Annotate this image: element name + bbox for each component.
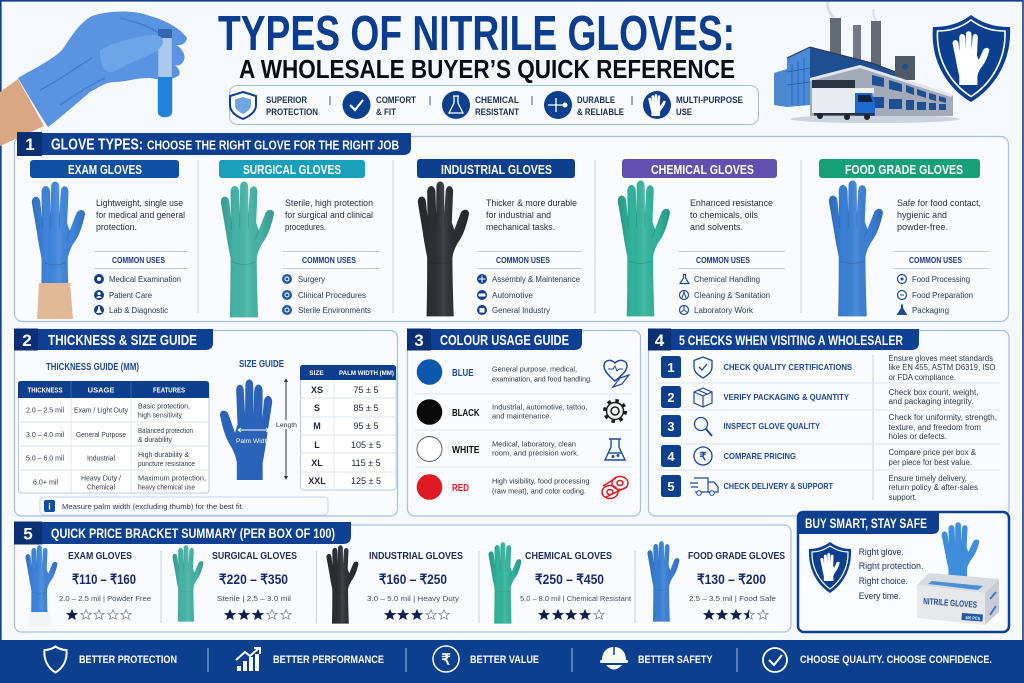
price: food grade gloves: ₹130 – ₹200: [697, 571, 766, 587]
illustration: glove rising from box: [917, 522, 999, 625]
column: exam gloves: Patient Care: [109, 291, 153, 300]
price: chemical gloves: CHEMICAL GLOVES: [525, 551, 612, 562]
row: blue: BLUE: [452, 368, 474, 379]
text: superior protection: PROTECTION: [266, 107, 318, 117]
check 4: compare pricing: COMPARE PRICING: [724, 451, 796, 461]
text: comfort and fit: & FIT: [376, 107, 396, 117]
glove: industrial: [418, 181, 469, 316]
diagram: hand measurement: [220, 378, 298, 528]
check 2: packaging and quantity: Check box count, weight,: [888, 388, 978, 397]
glove: chemical: [618, 180, 670, 316]
column: industrial gloves: Assembly & Maintenance: [492, 275, 581, 284]
heading: glove types: 1: [25, 135, 35, 154]
row: red: (raw meat), and color coding.: [492, 486, 586, 496]
illustration: glove rising from box: 100 PCS: [965, 615, 980, 621]
panel: 5 checks when visiting a wholesaler: [648, 328, 1009, 516]
footer banner: [0, 640, 1024, 683]
row: red: [417, 474, 628, 500]
text: durable and reliable: [577, 95, 624, 117]
row: blue: examination, and food handling.: [492, 374, 592, 384]
column: exam gloves: EXAM GLOVES: [68, 162, 142, 177]
heading: 5 checks: [648, 328, 919, 350]
icon: heart and hand: [604, 360, 629, 387]
column: food grade gloves: FOOD GRADE GLOVES: [845, 162, 963, 177]
panel: quick price bracket summary: [14, 522, 791, 632]
price: industrial gloves: INDUSTRIAL GLOVES: [369, 551, 463, 562]
column: food grade gloves: Food Preparation: [912, 291, 973, 300]
table: thickness guide: General Purpose: [76, 430, 126, 439]
row: white: [417, 436, 625, 462]
footer item: better value: ₹: [441, 652, 451, 668]
table: thickness guide: puncture resistance: [138, 459, 195, 468]
table: size chart: PALM WIDTH (MM): [339, 370, 394, 377]
heading: thickness and size guide: 2: [22, 331, 32, 350]
table: size chart: XL: [311, 458, 323, 468]
price: exam gloves: EXAM GLOVES: [68, 551, 132, 562]
text: superior protection: SUPERIOR: [266, 95, 307, 105]
panel: colour usage guide: [407, 328, 640, 516]
price: food grade gloves: [648, 541, 785, 622]
table: thickness guide: Balanced protection: [138, 426, 193, 435]
footer item: better performance: BETTER PERFORMANCE: [273, 654, 384, 666]
column: surgical gloves: Clinical Procedures: [298, 291, 366, 300]
table: thickness guide: Heavy Duty /: [81, 474, 122, 482]
text: chemical resistant: RESISTANT: [475, 107, 519, 117]
row: white: room, and precision work.: [492, 448, 579, 458]
check 1: quality certifications: [661, 354, 996, 382]
price: surgical gloves: SURGICAL GLOVES: [212, 551, 297, 562]
heading: colour usage guide: COLOUR USAGE GUIDE: [440, 332, 569, 349]
table: thickness guide: Basic protection,: [138, 402, 190, 410]
column: food grade gloves: hygienic and: [897, 210, 947, 220]
table: thickness guide: 3.0 – 4.0 mil: [26, 430, 64, 439]
table: size chart: 105 ± 5: [351, 440, 381, 450]
column: chemical gloves: Enhanced resistance: [690, 198, 773, 208]
table: thickness guide: Exam / Light Duty: [74, 406, 128, 414]
footer item: better protection: [44, 646, 177, 672]
price: food grade gloves: 2.5 – 3.5 mil | Food Safe: [689, 594, 776, 603]
table: size chart: SIZE: [309, 370, 324, 377]
column: exam gloves: for medical and general: [96, 210, 185, 220]
icon: shield with hand: [933, 15, 1010, 111]
footer item: choose quality: CHOOSE QUALITY. CHOOSE CONFIDENCE.: [800, 654, 992, 666]
callout: measuring note: i: [48, 502, 51, 512]
check 1: quality certifications: CHECK QUALITY CERTIFICATIONS: [724, 362, 852, 372]
callout: measuring note: Measure palm width (excluding thumb) for the best fit.: [62, 502, 244, 511]
rating: three and a half stars: [704, 610, 768, 619]
check 1: quality certifications: or FDA compliance.: [888, 373, 956, 382]
footer item: better safety: BETTER SAFETY: [638, 654, 713, 666]
column: food grade gloves: Food Processing: [912, 275, 970, 284]
check 3: inspect glove quality: INSPECT GLOVE QUALITY: [724, 421, 820, 431]
text: multi-purpose use: [676, 95, 743, 117]
panel: thickness and size guide: [14, 328, 398, 528]
check 2: packaging and quantity: and packaging integrity.: [888, 397, 974, 406]
price: industrial gloves: ₹160 – ₹250: [379, 571, 447, 587]
table: size chart: XXL: [308, 476, 326, 486]
glove: surgical: [221, 181, 274, 317]
icon: shield protection: [230, 92, 256, 119]
table: size chart: S: [314, 403, 320, 413]
row: red: High visibility, food processing: [492, 476, 590, 486]
row: white: Medical, laboratory, clean: [492, 440, 576, 448]
text: right glove slogan: Right glove.: [859, 547, 904, 558]
illustration: gloved hand holding test tube: [0, 12, 187, 146]
check 4: compare pricing: per piece for best value.: [888, 458, 972, 467]
table: size chart: L: [314, 440, 320, 450]
table: thickness guide: 2.0 – 2.5 mil: [26, 406, 64, 414]
column: surgical gloves: Sterile, high protection: [285, 198, 373, 208]
check 3: inspect glove quality: holes or defects.: [888, 432, 947, 441]
check 1: quality certifications: like EN 455, ASTM D6319, ISO: [888, 363, 996, 372]
text: chemical resistant: CHEMICAL: [475, 95, 519, 105]
column: industrial gloves: [417, 159, 582, 316]
check 4: compare pricing: ₹: [700, 451, 706, 463]
column: chemical gloves: and solvents.: [690, 222, 743, 232]
title: A WHOLESALE BUYER’S QUICK REFERENCE: [239, 54, 735, 84]
heading: size guide: SIZE GUIDE: [239, 359, 284, 370]
text: chemical resistant: [475, 95, 519, 117]
table: thickness guide: 5.0 – 6.0 mil: [26, 454, 64, 462]
check 2: packaging and quantity: [661, 386, 978, 408]
heading: glove types: GLOVE TYPES:: [51, 136, 143, 154]
heading: glove types: CHOOSE THE RIGHT GLOVE FOR THE RIGHT JOB: [147, 138, 399, 152]
row: black: and maintenance.: [492, 412, 552, 420]
table: thickness guide: 6.0+ mil: [33, 478, 58, 486]
price: chemical gloves: [489, 542, 632, 624]
text: multi-purpose use: USE: [676, 107, 692, 117]
check 5: delivery and support: support.: [888, 493, 917, 502]
glove: food grade: [829, 180, 883, 316]
heading: colour usage guide: [407, 328, 582, 350]
price: industrial gloves: [327, 545, 463, 624]
text: durable and reliable: & RELIABLE: [577, 107, 624, 117]
heading: glove types: [17, 132, 411, 156]
check 5: delivery and support: 5: [667, 479, 675, 494]
table: thickness guide: Industrial: [87, 454, 115, 462]
heading: quick price bracket summary: [14, 522, 351, 544]
check 2: packaging and quantity: 2: [667, 390, 675, 405]
heading: 5 checks: 5 CHECKS WHEN VISITING A WHOLESALER: [679, 332, 903, 348]
illustration: factory with delivery truck: [774, 2, 960, 123]
price: surgical gloves: ₹220 – ₹350: [219, 571, 288, 587]
text: right glove slogan: [859, 547, 924, 602]
column: exam gloves: [30, 160, 188, 319]
column: food grade gloves: Packaging: [912, 306, 949, 315]
column: food grade gloves: Safe for food contact,: [897, 198, 981, 208]
column: chemical gloves: to chemicals, oils: [690, 210, 758, 220]
table: size chart: 125 ± 5: [351, 476, 381, 486]
heading: quick price bracket summary: QUICK PRICE BRACKET SUMMARY (PER BOX OF 100): [51, 525, 335, 541]
check 4: compare pricing: Compare price per box &: [888, 448, 977, 457]
table: thickness guide: THICKNESS: [28, 386, 62, 394]
rating: three stars: [385, 610, 449, 619]
text: comfort and fit: [376, 95, 416, 117]
column: exam gloves: protection.: [96, 222, 137, 232]
column: surgical gloves: Sterile Environments: [298, 306, 371, 315]
icon: durable: [544, 91, 572, 119]
column: chemical gloves: Cleaning & Sanitation: [694, 291, 770, 300]
icon: check: [342, 91, 370, 119]
price: surgical gloves: Sterile | 2.5 – 3.0 mil: [217, 594, 291, 603]
footer item: better protection: BETTER PROTECTION: [79, 654, 177, 666]
table: size chart: M: [313, 421, 321, 431]
text: superior protection: [266, 95, 318, 117]
table: thickness guide: Chemical: [87, 482, 115, 492]
price: industrial gloves: 3.0 – 5.0 mil | Heavy Duty: [367, 594, 459, 603]
column: surgical gloves: procedures.: [285, 222, 326, 232]
glove: exam: [32, 181, 85, 319]
column: exam gloves: Lightweight, single use: [96, 198, 183, 208]
icon: raw meat: [602, 476, 628, 498]
text: multi-purpose use: MULTI-PURPOSE: [676, 95, 743, 105]
check 5: delivery and support: [661, 474, 978, 502]
table: thickness guide: high sensitivity: [138, 410, 182, 420]
check 3: inspect glove quality: [661, 413, 997, 441]
column: food grade gloves: COMMON USES: [909, 256, 963, 265]
column: food grade gloves: [819, 159, 989, 316]
price: chemical gloves: ₹250 – ₹450: [535, 571, 604, 587]
text: right glove slogan: Every time.: [859, 591, 901, 602]
title: TYPES OF NITRILE GLOVES:: [218, 7, 735, 61]
heading: 5 checks: 4: [655, 331, 665, 350]
icon: flask: [605, 439, 625, 460]
rating: four stars: [539, 610, 604, 619]
column: chemical gloves: Chemical Handling: [694, 275, 760, 284]
callout: measuring note: [40, 497, 328, 515]
column: surgical gloves: SURGICAL GLOVES: [243, 162, 341, 177]
check 3: inspect glove quality: 3: [667, 419, 675, 434]
rating: one star: [67, 610, 131, 619]
check 4: compare pricing: 4: [667, 449, 675, 464]
illustration: glove rising from box: NITRILE GLOVES: [923, 596, 977, 610]
panel: glove types: [14, 132, 1008, 322]
column: industrial gloves: for industrial and: [486, 210, 551, 220]
check 3: inspect glove quality: texture, and freedom from: [888, 423, 981, 432]
column: exam gloves: COMMON USES: [112, 256, 166, 265]
check 1: quality certifications: Ensure gloves meet standards: [888, 354, 993, 363]
price: chemical gloves: 5.0 – 8.0 mil | Chemical Resistant: [520, 594, 632, 603]
price: exam gloves: [26, 545, 151, 626]
table: thickness guide: heavy chemical use: [138, 482, 195, 492]
price: exam gloves: ₹110 – ₹160: [72, 571, 136, 587]
diagram: hand measurement: Length: [276, 422, 297, 429]
table: size chart: 115 ± 5: [351, 458, 381, 468]
heading: buy smart: BUY SMART, STAY SAFE: [805, 516, 927, 531]
diagram: hand measurement: Palm Width: [236, 438, 270, 445]
icon: gear: [604, 400, 626, 422]
check 4: compare pricing: [661, 445, 977, 467]
heading: thickness guide: THICKNESS GUIDE (MM): [46, 362, 139, 373]
heading: quick price bracket summary: 5: [23, 524, 33, 544]
table: thickness guide: [18, 381, 209, 493]
check 3: inspect glove quality: Check for uniformity, strength,: [888, 413, 997, 422]
table: size chart: 75 ± 5: [354, 385, 378, 395]
check 2: packaging and quantity: VERIFY PACKAGING & QUANTITY: [724, 392, 849, 402]
column: industrial gloves: General Industry: [492, 306, 550, 315]
row: black: [417, 399, 626, 425]
text: right glove slogan: Right protection.: [859, 561, 924, 572]
check 5: delivery and support: Ensure timely delivery,: [888, 474, 967, 483]
table: thickness guide: FEATURES: [153, 386, 185, 394]
table: thickness guide: Maximum protection,: [138, 474, 206, 482]
row: blue: [417, 359, 629, 387]
column: industrial gloves: mechanical tasks.: [486, 222, 555, 232]
row: black: BLACK: [452, 408, 480, 419]
price: exam gloves: 2.0 – 2.5 mil | Powder Free: [59, 594, 151, 603]
table: size chart: 95 ± 5: [354, 421, 378, 431]
column: industrial gloves: Automotive: [492, 291, 534, 300]
row: blue: General purpose, medical,: [492, 364, 577, 374]
table: thickness guide: USAGE: [88, 386, 114, 394]
icon: flask: [442, 91, 470, 119]
column: surgical gloves: [219, 160, 380, 317]
row: white: WHITE: [452, 445, 480, 456]
column: chemical gloves: Laboratory Work: [694, 306, 754, 315]
check 1: quality certifications: 1: [667, 360, 675, 375]
icon: hand: [643, 91, 671, 126]
footer item: better performance: [236, 648, 384, 671]
column: chemical gloves: COMMON USES: [696, 256, 751, 265]
feature strip: [230, 86, 758, 126]
table: thickness guide: & durability: [138, 435, 172, 444]
table: size chart: XS: [311, 385, 323, 395]
column: food grade gloves: powder-free.: [897, 222, 948, 232]
text: right glove slogan: Right choice.: [859, 576, 908, 587]
table: thickness guide: High durability &: [138, 450, 189, 459]
column: industrial gloves: INDUSTRIAL GLOVES: [441, 162, 552, 177]
title: [218, 7, 735, 84]
panel: buy smart, stay safe: [797, 511, 1009, 632]
rating: three stars: [225, 610, 291, 619]
heading: colour usage guide: 3: [414, 331, 424, 350]
heading: buy smart: [797, 511, 939, 534]
heading: thickness and size guide: THICKNESS & SIZE GUIDE: [48, 332, 197, 349]
column: chemical gloves: [618, 159, 785, 316]
footer item: better value: BETTER VALUE: [470, 654, 539, 666]
column: surgical gloves: COMMON USES: [302, 256, 357, 265]
footer item: better value: [433, 646, 539, 672]
column: chemical gloves: CHEMICAL GLOVES: [651, 162, 754, 177]
column: exam gloves: Medical Examination: [109, 275, 181, 284]
price: surgical gloves: [173, 545, 297, 622]
column: industrial gloves: Thicker & more durable: [486, 198, 577, 208]
row: red: RED: [452, 483, 469, 494]
text: durable and reliable: DURABLE: [577, 95, 615, 105]
footer item: better safety: [600, 647, 713, 670]
column: surgical gloves: Surgery: [298, 275, 325, 284]
table: size chart: [300, 365, 396, 490]
column: surgical gloves: for surgical and clinical: [285, 210, 373, 220]
icon: shield with hand: [809, 542, 851, 594]
heading: thickness and size guide: [14, 328, 213, 350]
check 5: delivery and support: CHECK DELIVERY & SUPPORT: [724, 481, 834, 491]
row: black: Industrial, automotive, tattoo,: [492, 402, 588, 412]
check 5: delivery and support: return policy & after-sales: [888, 483, 978, 492]
footer item: choose quality: [763, 648, 992, 672]
table: size chart: 85 ± 5: [354, 403, 378, 413]
text: comfort and fit: COMFORT: [376, 95, 416, 105]
column: exam gloves: Lab & Diagnostic: [109, 306, 168, 315]
column: industrial gloves: COMMON USES: [496, 256, 551, 265]
price: food grade gloves: FOOD GRADE GLOVES: [688, 551, 785, 562]
